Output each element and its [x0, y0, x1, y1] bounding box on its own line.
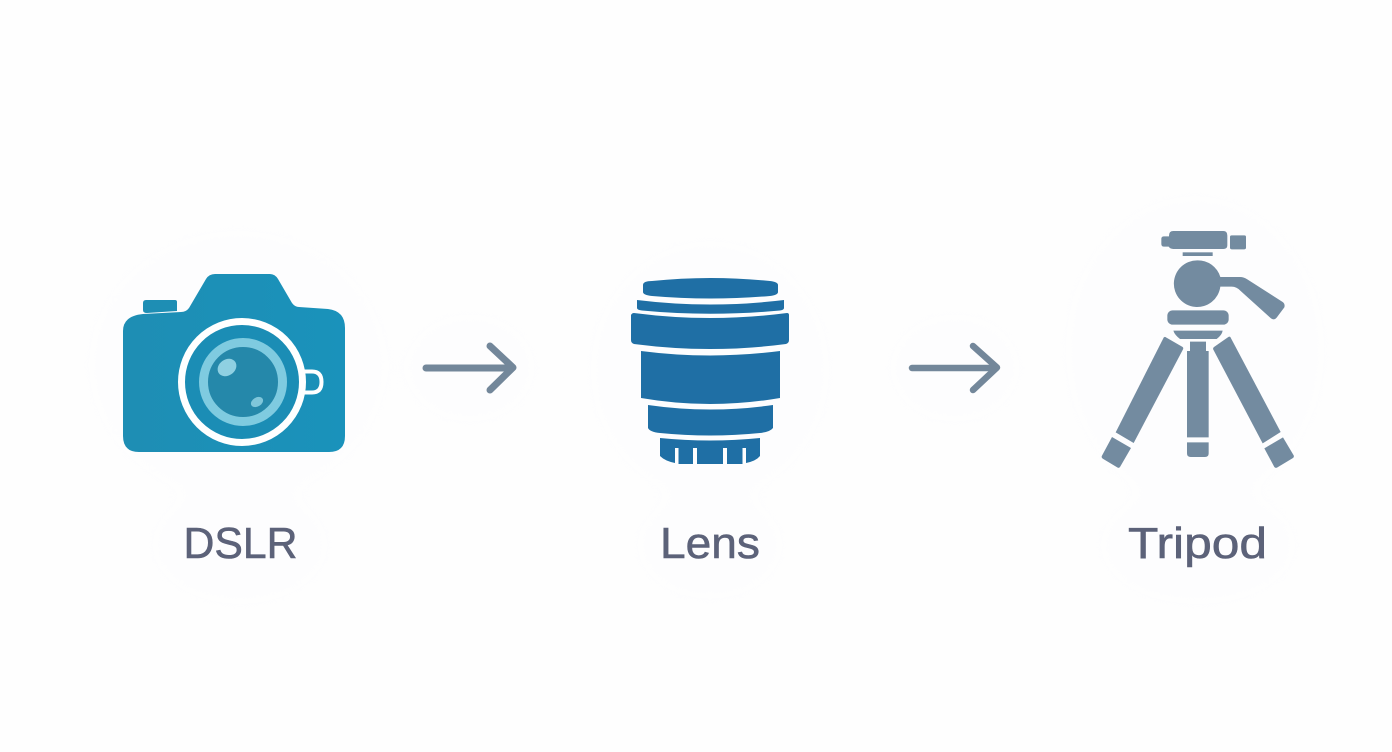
- camera flash button: [143, 300, 177, 313]
- tripod camera plate: [1161, 231, 1227, 249]
- tripod right foot: [1264, 437, 1294, 468]
- tripod center foot: [1187, 442, 1209, 457]
- icon: DSLR camera: [123, 274, 345, 452]
- tripod yoke: [1173, 331, 1223, 339]
- lens mount: [660, 438, 760, 464]
- tripod center column: [1187, 342, 1209, 437]
- tripod right leg: [1213, 337, 1281, 443]
- label: Lens: Lens: [660, 519, 760, 568]
- lens highlight small: [249, 395, 265, 409]
- label: DSLR: DSLR: [184, 519, 298, 568]
- icon: tripod: [1102, 231, 1294, 468]
- tripod ball head with handle: [1174, 260, 1285, 319]
- tripod left leg: [1116, 337, 1183, 443]
- arrow: camera to lens: [426, 346, 513, 390]
- icon: lens: [631, 278, 789, 464]
- lens highlight large: [214, 355, 240, 380]
- camera lens ring: [182, 322, 302, 442]
- label: Tripod: Tripod: [1128, 519, 1267, 568]
- lens front cap: [643, 278, 778, 298]
- lens barrel mid: [641, 351, 780, 404]
- tripod left foot: [1102, 437, 1131, 468]
- lens lower barrel: [648, 405, 773, 436]
- camera body: [123, 274, 345, 452]
- camera side loop: [298, 372, 322, 392]
- tripod plate spacer: [1183, 252, 1213, 256]
- lens barrel wide: [631, 313, 789, 349]
- tripod collar: [1167, 310, 1229, 325]
- arrow: lens to tripod: [912, 346, 997, 390]
- camera lens glass: [204, 342, 282, 422]
- tripod plate tab: [1230, 235, 1246, 249]
- lens ring: [637, 300, 784, 314]
